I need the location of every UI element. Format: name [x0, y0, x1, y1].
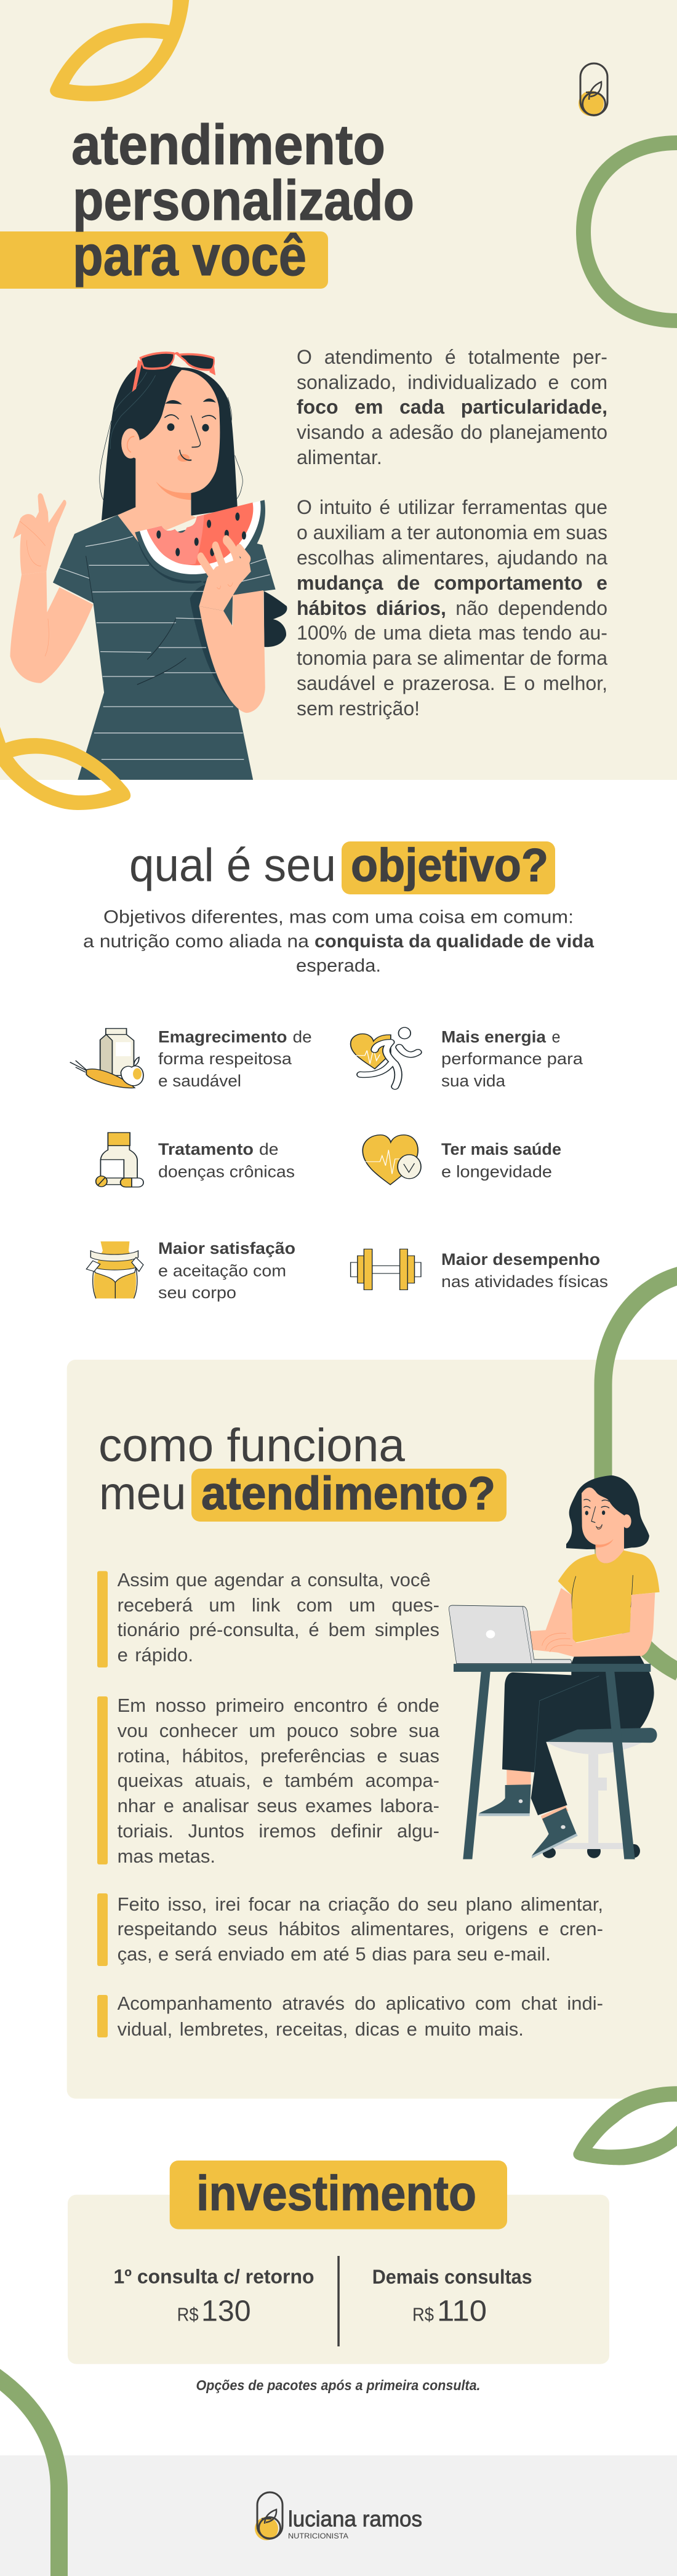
text block: step 1 — [117, 1569, 439, 1666]
icon: waist and tape — [86, 1242, 143, 1299]
heading: como funciona meu atendimento: meu — [99, 1467, 186, 1520]
text block: step 3: em — [290, 1943, 317, 1965]
text block: intro paragraphs: mas — [478, 622, 516, 644]
text block: step 2: vou — [118, 1720, 148, 1741]
text block: step 1: rápido. — [135, 1644, 193, 1666]
text block: intro paragraphs: visando — [297, 421, 364, 443]
text: objective items: forma respeitosa — [158, 1049, 292, 1068]
text: objective items: e longevidade — [441, 1162, 552, 1181]
text block: step 2: Em — [118, 1695, 146, 1716]
text block: step 1: Assim — [118, 1569, 169, 1591]
panel: footer — [0, 2455, 677, 2576]
text block: intro paragraphs: escolhas — [297, 547, 374, 569]
text: objective items: de — [259, 1140, 278, 1158]
text: objective items: Maior desempenho — [441, 1250, 600, 1269]
text block: step 2: Juntos — [188, 1820, 244, 1842]
text block: intro paragraphs: que — [575, 496, 607, 518]
text block: step 4: aplicativo — [386, 1992, 465, 2014]
text block: step 2: preferências — [260, 1745, 366, 1767]
text block: step 3: focar — [249, 1893, 291, 1914]
icon: heart and runner — [351, 1027, 418, 1086]
text block: step 3: até — [323, 1943, 350, 1965]
text block: intro paragraphs: alimentar — [443, 647, 524, 669]
text block: step 2: nosso — [155, 1695, 206, 1716]
text block: step 2: algu- — [397, 1820, 439, 1842]
heading: investimento: investimento — [196, 2165, 476, 2221]
text block: intro paragraphs: planejamento — [489, 421, 607, 443]
panel: investimento — [68, 2161, 609, 2364]
text block: step 4: vidual, — [118, 2018, 172, 2040]
text block: intro paragraphs: suas — [566, 521, 607, 544]
note: opções de pacotes: Opções de pacotes após a primeira consulta. — [196, 2377, 480, 2393]
text block: step 3: cren- — [559, 1918, 603, 1940]
icon: green arc bottom left — [0, 2376, 59, 2576]
title: personalizado — [73, 169, 414, 232]
icon: top yellow leaf — [50, 0, 189, 102]
footer logo: NUTRICIONISTA — [288, 2532, 348, 2540]
heading: qual é seu objetivo: qual é seu — [129, 840, 336, 892]
text block: step 3: alimentar, — [521, 1893, 603, 1914]
text block: step 1: um — [349, 1594, 375, 1616]
text block: intro paragraphs: é — [379, 496, 390, 518]
text block: intro paragraphs: prazerosa. — [402, 672, 495, 694]
text block: intro paragraphs: e — [548, 371, 559, 393]
text block: intro paragraphs: individualizado — [407, 371, 537, 393]
text block: step 3: na — [299, 1893, 320, 1914]
text block: objetivos intro — [83, 907, 594, 976]
text block: intro paragraphs: mudança — [297, 572, 383, 594]
text block: intro paragraphs: auxiliam — [313, 521, 385, 544]
text block: intro paragraphs: se — [417, 647, 438, 669]
text block: step 2: encontro — [294, 1695, 368, 1716]
text block: step 2: hábitos, — [182, 1745, 249, 1767]
illustration: woman at laptop — [449, 1475, 660, 1859]
text block: intro paragraphs: adesão — [389, 421, 454, 443]
text block: step 3: alimentares, — [351, 1918, 455, 1940]
text block: intro paragraphs: dieta — [428, 622, 471, 644]
divider and prices: 130 — [201, 2295, 251, 2328]
text block: step 4: mais. — [478, 2018, 524, 2040]
text block: step 3: para — [413, 1943, 451, 1965]
panel: hero background — [0, 0, 677, 780]
icon: green arc middle — [603, 1275, 677, 1672]
text block: step 1: com — [297, 1594, 332, 1616]
text block: step 3: seu — [427, 1893, 458, 1914]
text block: step 4: através — [282, 1992, 345, 2014]
divider and prices: Demais consultas — [372, 2266, 532, 2288]
text block: intro paragraphs: não — [455, 597, 489, 619]
text: objective items: Mais energia — [441, 1028, 547, 1046]
text: objective items: Tratamento — [158, 1140, 254, 1158]
text block: step 2: labora- — [380, 1795, 439, 1816]
text block: step 1: tionário — [118, 1619, 180, 1640]
icon: green leaf right — [573, 2086, 677, 2165]
icon: milk carrot apple — [70, 1029, 143, 1088]
text block: step 3: do — [398, 1893, 419, 1914]
text block: step 4: do — [355, 1992, 376, 2014]
text block: step 3: hábitos — [279, 1918, 340, 1940]
text block: step 2: exames — [305, 1795, 372, 1816]
icon: dumbbell — [351, 1249, 421, 1290]
text block: step 3: e-mail. — [494, 1943, 551, 1965]
text block: intro paragraphs: e — [596, 572, 607, 594]
text block: intro paragraphs: ajudando — [497, 547, 578, 569]
text block: intro paragraphs: diários, — [376, 597, 446, 619]
text block: step 3: seus — [228, 1918, 268, 1940]
text block: intro paragraphs: ferramentas — [462, 496, 567, 518]
text: objective items: Maior satisfação — [158, 1239, 295, 1258]
text block: objetivos intro: a nutrição como aliada na — [83, 931, 309, 952]
text block: step 4 — [117, 1992, 603, 2040]
heading: como funciona meu atendimento: atendimento? — [201, 1467, 495, 1520]
title — [0, 113, 414, 289]
text block: step 1: você — [390, 1569, 431, 1591]
text block: step 1: que — [175, 1569, 207, 1591]
text: objective items: Emagrecimento — [158, 1028, 287, 1046]
text block: step 2: suas — [399, 1745, 439, 1767]
text block: step 2: toriais. — [118, 1820, 174, 1842]
text block: step 3: enviado — [218, 1943, 284, 1965]
text block: intro paragraphs: de — [397, 572, 420, 594]
icon: medicine bottle — [96, 1133, 143, 1187]
text block: step 3: seu — [457, 1943, 487, 1965]
text block: intro paragraphs: hábitos — [297, 597, 367, 619]
text block: step 2: sobre — [350, 1720, 398, 1741]
text block: step 4: dicas — [355, 2018, 399, 2040]
text block: step 1: bem — [329, 1619, 366, 1640]
text: objective items: e aceitação com — [158, 1261, 286, 1280]
text: objective items: doenças crônicas — [158, 1162, 295, 1181]
text block: intro paragraphs: com — [571, 371, 607, 393]
text block: step 2: nhar — [118, 1795, 156, 1816]
text: objective items: seu corpo — [158, 1283, 236, 1302]
panel: como funciona — [67, 1360, 677, 2099]
text block: step 3: isso, — [168, 1893, 207, 1914]
text block: step 4: indi- — [567, 1992, 603, 2014]
footer logo: luciana ramos — [288, 2506, 422, 2531]
text block: step 2: mas — [118, 1845, 153, 1867]
text block: step 2: um — [249, 1720, 276, 1741]
text block: step 1: e — [118, 1644, 128, 1666]
text block: intro paragraphs: alimentares, — [382, 547, 489, 569]
text block: intro paragraphs: de — [354, 622, 376, 644]
divider and prices: R$ — [412, 2303, 434, 2325]
text block: step 2: metas. — [158, 1845, 215, 1867]
text block: step 2: definir — [330, 1820, 382, 1842]
title: atendimento — [71, 113, 385, 176]
icon: lower yellow leaf — [0, 727, 130, 810]
text block: intro paragraphs: em — [355, 396, 383, 418]
heading: qual é seu objetivo — [129, 840, 555, 894]
text: objective items: Ter mais saúde — [441, 1140, 561, 1158]
text block: step 3: irei — [215, 1893, 241, 1914]
text block: intro paragraphs: de — [530, 647, 551, 669]
text block: intro paragraphs: cada — [399, 396, 444, 418]
text block: intro paragraphs: e — [383, 672, 395, 694]
text block: intro paragraphs: para — [372, 647, 412, 669]
text block: step 2: também — [285, 1770, 354, 1791]
text block: intro paragraphs: particularidade, — [461, 396, 607, 418]
text block: intro paragraphs: a — [391, 521, 402, 544]
text block: step 2: é — [377, 1695, 388, 1716]
text block: step 4: lembretes, — [180, 2018, 268, 2040]
text block: intro paragraphs: melhor, — [543, 672, 607, 694]
text block: step 2: analisar — [182, 1795, 249, 1816]
text block: intro paragraphs: tonomia — [297, 647, 367, 669]
text block: intro paragraphs: na — [585, 547, 607, 569]
text block: intro paragraphs: o — [297, 521, 308, 544]
text block: step 2: acompa- — [365, 1770, 439, 1791]
text: objective items: performance para — [441, 1049, 583, 1068]
text: objective items: nas atividades físicas — [441, 1272, 608, 1291]
text: objective items: e — [551, 1028, 560, 1046]
text block: step 2: onde — [397, 1695, 439, 1716]
text block: intro paragraphs: a — [371, 421, 382, 443]
text: objective items: e saudável — [158, 1072, 241, 1090]
text block: objetivos intro: esperada. — [296, 956, 381, 976]
divider and prices: 1º consulta c/ retorno — [113, 2265, 314, 2287]
text block: step 2: pouco — [287, 1720, 338, 1741]
divider and prices: R$ — [177, 2303, 199, 2325]
illustration: woman eating watermelon — [10, 353, 287, 780]
icon: heart with check — [363, 1135, 421, 1185]
text block: step 4: chat — [521, 1992, 557, 2014]
heading: como funciona meu atendimento: como funciona — [98, 1419, 406, 1472]
text block: step 1: receberá — [118, 1594, 193, 1616]
text block: intro paragraphs: alimentar. — [297, 446, 382, 468]
text block: step 2: seus — [257, 1795, 297, 1816]
text block: intro paragraphs: atendimento — [324, 346, 433, 368]
text block: step 3 — [118, 1893, 603, 1965]
text block: step 2: atuais, — [194, 1770, 251, 1791]
icon: green arc right — [583, 143, 677, 321]
text block: step 1: consulta, — [308, 1569, 384, 1591]
text block: step 3: 5 — [355, 1943, 366, 1965]
text block: step 3: e — [158, 1943, 169, 1965]
text block: intro paragraphs: comportamento — [434, 572, 583, 594]
text block: intro paragraphs: é — [445, 346, 456, 368]
text block: step 3: respeitando — [118, 1918, 217, 1940]
text block: intro paragraphs: dependendo — [498, 597, 607, 619]
text block: step 2: queixas — [118, 1770, 183, 1791]
text block: intro paragraphs: per- — [572, 346, 607, 368]
text block: intro paragraphs: au- — [579, 622, 607, 644]
text block: intro paragraphs — [297, 346, 608, 720]
text block: step 3: ças, — [118, 1943, 152, 1965]
text block: step 1: pré-consulta, — [189, 1619, 299, 1640]
text block: intro paragraphs: O — [297, 496, 312, 518]
bullet bars — [97, 1571, 108, 2037]
text block: step 1: um — [209, 1594, 235, 1616]
text block: step 2: sua — [409, 1720, 439, 1741]
text block: intro paragraphs: utilizar — [398, 496, 455, 518]
text block: step 1: simples — [375, 1619, 439, 1640]
text block: intro paragraphs: restrição! — [338, 697, 420, 720]
text block: step 2: conhecer — [159, 1720, 238, 1741]
text block: objetivos intro: Objetivos diferentes, mas com uma coisa em comum: — [103, 907, 574, 927]
text block: step 1: link — [252, 1594, 280, 1616]
text block: intro paragraphs: saudável — [297, 672, 375, 694]
text block: intro paragraphs: sonalizado, — [297, 371, 396, 393]
text: objective items: sua vida — [441, 1072, 506, 1090]
text block: step 3: Feito — [118, 1893, 160, 1914]
text block: intro paragraphs: foco — [297, 396, 338, 418]
text block: step 2: e — [164, 1795, 174, 1816]
text block: step 4: e — [407, 2018, 417, 2040]
text block: step 4: com — [475, 1992, 511, 2014]
text block: intro paragraphs: intuito — [319, 496, 372, 518]
heading: qual é seu objetivo: objetivo? — [351, 840, 548, 892]
text block: step 3: criação — [328, 1893, 390, 1914]
text block: step 3: dias — [372, 1943, 407, 1965]
text block: step 3: e — [539, 1918, 549, 1940]
text block: step 1: ques- — [391, 1594, 439, 1616]
text block: step 1: é — [308, 1619, 319, 1640]
text block: intro paragraphs: do — [460, 421, 483, 443]
text block: step 3: será — [175, 1943, 212, 1965]
text block: step 4: Acompanhamento — [118, 1992, 272, 2014]
title: para você — [73, 225, 306, 287]
text block: intro paragraphs: 100% — [297, 622, 347, 644]
text block: step 2: e — [262, 1770, 273, 1791]
text block: step 2: e — [377, 1745, 388, 1767]
text block: step 4: muito — [424, 2018, 471, 2040]
text block: intro paragraphs: forma — [557, 647, 607, 669]
divider and prices — [113, 2256, 532, 2346]
text block: step 3: origens — [465, 1918, 528, 1940]
text block: intro paragraphs: tendo — [523, 622, 572, 644]
icon: brand logo top — [579, 63, 607, 116]
text block: intro paragraphs: O — [297, 346, 312, 368]
text: objective items — [158, 1028, 608, 1302]
text block: intro paragraphs: autonomia — [436, 521, 527, 544]
text block: intro paragraphs: sem — [297, 697, 334, 720]
text block: intro paragraphs: E — [503, 672, 516, 694]
text block: step 2: iremos — [258, 1820, 316, 1842]
heading: como funciona meu atendimento — [98, 1419, 507, 1522]
text block: objetivos intro: conquista da qualidade de vida — [314, 931, 594, 952]
text block: intro paragraphs: em — [533, 521, 560, 544]
text block: step 3: plano — [466, 1893, 513, 1914]
text block: step 2: primeiro — [215, 1695, 284, 1716]
divider and prices: 110 — [437, 2295, 487, 2328]
text block: step 2: rotina, — [118, 1745, 170, 1767]
text block: step 1: agendar — [214, 1569, 284, 1591]
text block: step 1: a — [290, 1569, 301, 1591]
text block: step 4: receitas, — [276, 2018, 348, 2040]
text block: intro paragraphs: uma — [383, 622, 422, 644]
text block: intro paragraphs: ter — [407, 521, 430, 544]
text block: step 2 — [117, 1695, 439, 1867]
footer logo — [255, 2492, 422, 2540]
text: objective items: de — [293, 1028, 312, 1046]
text block: intro paragraphs: o — [524, 672, 535, 694]
text block: intro paragraphs: totalmente — [468, 346, 560, 368]
